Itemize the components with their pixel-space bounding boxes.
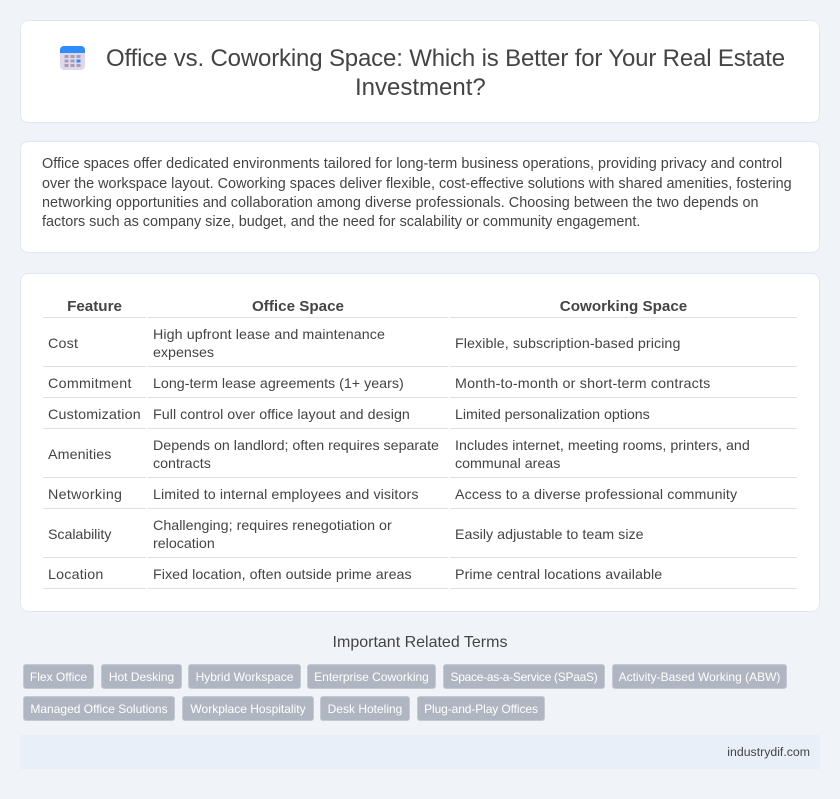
row: location bbox=[43, 557, 797, 589]
row: networking bbox=[43, 477, 797, 503]
table header: Feature bbox=[67, 298, 122, 315]
row: amenities: Depends on landlord; often requires separate bbox=[153, 438, 439, 454]
source: industrydif.com bbox=[727, 745, 810, 759]
intro text: factors such as company size, budget, and the need for scalability or community engagement. bbox=[42, 214, 640, 230]
related term tags bbox=[23, 664, 787, 721]
row: amenities: communal areas bbox=[455, 456, 560, 472]
table header: Office Space bbox=[252, 298, 344, 315]
row: amenities: Amenities bbox=[48, 447, 111, 463]
row: amenities: contracts bbox=[153, 456, 211, 472]
table header: Coworking Space bbox=[560, 298, 687, 315]
intro text bbox=[42, 156, 792, 230]
related term tags: Hybrid Workspace bbox=[196, 670, 293, 684]
icon: calendar bbox=[60, 46, 85, 70]
row: commitment: Commitment bbox=[48, 376, 132, 392]
row: networking: Limited to internal employees and visitors bbox=[153, 487, 419, 503]
footer bbox=[20, 735, 820, 769]
row: scalability: Easily adjustable to team size bbox=[455, 527, 644, 543]
row: customization bbox=[43, 397, 797, 423]
related term tags: Flex Office bbox=[30, 670, 87, 684]
intro text: networking opportunities and collaboration among diverse professionals. Choosing between the two depends on bbox=[42, 195, 759, 211]
row: cost: expenses bbox=[153, 345, 214, 361]
title: Office vs. Coworking Space: Which is Better for Your Real Estate bbox=[106, 45, 785, 72]
row: customization: Limited personalization options bbox=[455, 407, 650, 423]
related term tags: Activity-Based Working (ABW) bbox=[619, 670, 780, 684]
panel: header bbox=[20, 20, 820, 123]
row: customization: Customization bbox=[48, 407, 141, 423]
row: scalability: relocation bbox=[153, 536, 215, 552]
related term tags: Space-as-a-Service (SPaaS) bbox=[450, 670, 598, 684]
heading: related terms: Important Related Terms bbox=[333, 634, 507, 651]
title: Investment? bbox=[355, 74, 486, 101]
row: amenities bbox=[43, 428, 797, 472]
row: commitment: Long-term lease agreements (1+ years) bbox=[153, 376, 404, 392]
related term tags: Managed Office Solutions bbox=[30, 702, 168, 716]
row: cost bbox=[43, 317, 797, 361]
panel: introduction bbox=[20, 141, 820, 253]
related term tags: Desk Hoteling bbox=[328, 702, 402, 716]
row: networking: Networking bbox=[48, 487, 122, 503]
related term tags: Hot Desking bbox=[109, 670, 174, 684]
row: location: Location bbox=[48, 567, 103, 583]
title bbox=[106, 45, 785, 101]
row: location: Prime central locations available bbox=[455, 567, 662, 583]
row: amenities: Includes internet, meeting rooms, printers, and bbox=[455, 438, 750, 454]
row: customization: Full control over office layout and design bbox=[153, 407, 410, 423]
row: scalability: Challenging; requires renegotiation or bbox=[153, 518, 392, 534]
row: scalability: Scalability bbox=[48, 527, 111, 543]
intro text: over the workspace layout. Coworking spaces deliver flexible, cost-effective solutions with shared amenities, fostering bbox=[42, 176, 792, 192]
row: cost: Flexible, subscription-based pricing bbox=[455, 336, 680, 352]
row: networking: Access to a diverse professional community bbox=[455, 487, 737, 503]
related term tags: Workplace Hospitality bbox=[190, 702, 306, 716]
related term tags: Enterprise Coworking bbox=[314, 670, 429, 684]
intro text: Office spaces offer dedicated environments tailored for long-term business operations, providing privacy and control bbox=[42, 156, 782, 172]
panel: comparison table bbox=[20, 273, 820, 612]
row: commitment bbox=[43, 366, 797, 392]
row: location: Fixed location, often outside prime areas bbox=[153, 567, 412, 583]
table header bbox=[67, 298, 687, 315]
row: cost: High upfront lease and maintenance bbox=[153, 327, 385, 343]
row: commitment: Month-to-month or short-term contracts bbox=[455, 376, 710, 392]
row: cost: Cost bbox=[48, 336, 78, 352]
related term tags: Plug-and-Play Offices bbox=[424, 702, 538, 716]
row: scalability bbox=[43, 508, 797, 552]
